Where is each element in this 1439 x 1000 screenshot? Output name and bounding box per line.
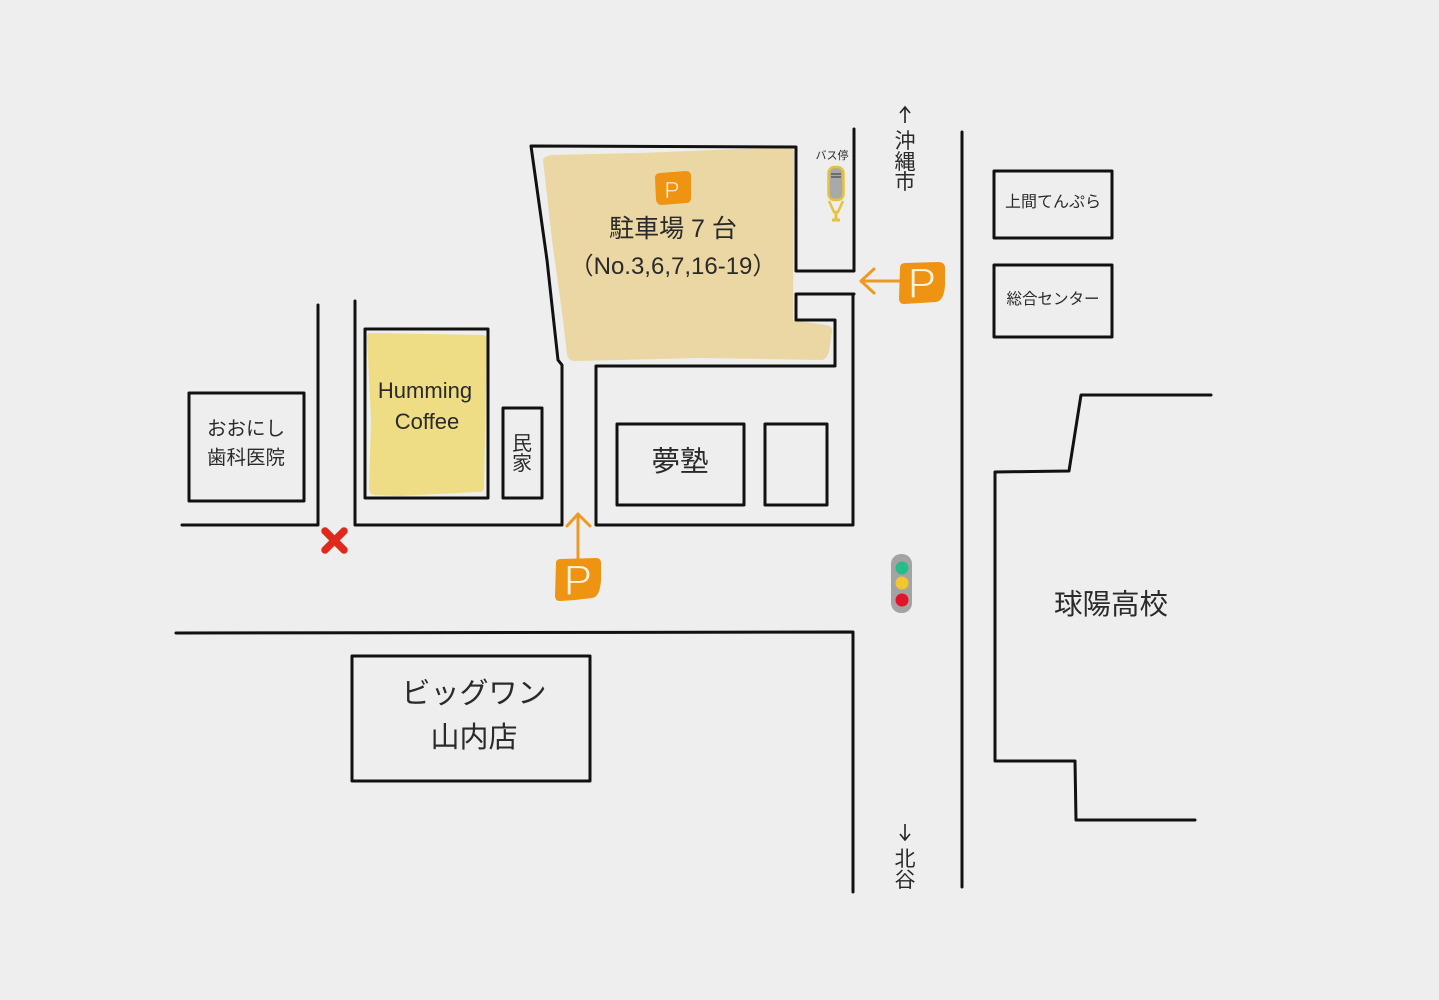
- direction label: Chatan: 谷: [894, 869, 916, 892]
- unnamed building: [765, 424, 827, 505]
- Yumejuku building: 夢塾: [651, 446, 709, 478]
- road edge: main street east side: [960, 132, 964, 887]
- icon: parking sign small: P: [664, 177, 680, 203]
- Kyuyo High School: [995, 395, 1211, 820]
- icon: parking sign small: [655, 171, 691, 205]
- Yumejuku building: [617, 424, 744, 505]
- Sogo Center building: [994, 265, 1112, 337]
- direction label: Chatan: 北: [894, 848, 916, 871]
- clinic building: 歯科医院: [207, 447, 285, 469]
- Kyuyo High School: 球陽高校: [1054, 589, 1168, 621]
- direction label: Okinawa City: 沖: [894, 130, 916, 153]
- house building: 家: [512, 452, 532, 475]
- Humming Coffee building: Humming: [378, 378, 472, 403]
- icon: bus stop: バス停: [816, 149, 848, 162]
- arrow and parking sign: south entrance: P: [564, 557, 592, 605]
- road edge: left side street: [182, 305, 318, 525]
- icon: traffic light: [891, 554, 912, 613]
- parking lot area fill: [543, 147, 832, 361]
- house building: [503, 408, 542, 498]
- Uema Tempura building: [994, 171, 1112, 238]
- parking lot label: 駐車場 7 台: [609, 215, 737, 243]
- arrow and parking sign: east entrance: P: [908, 260, 936, 308]
- direction label: Okinawa City: [894, 107, 916, 194]
- direction label: Okinawa City: 縄: [894, 151, 916, 174]
- arrow and parking sign: south entrance: [555, 514, 601, 605]
- Big One building: [352, 656, 590, 781]
- Humming Coffee building: Coffee: [395, 409, 459, 434]
- clinic building: おおにし: [207, 418, 285, 440]
- direction label: Okinawa City: 市: [894, 171, 916, 194]
- house building: 民: [512, 433, 532, 455]
- direction label: Chatan: [894, 824, 916, 892]
- Sogo Center building: 総合センター: [1006, 290, 1100, 308]
- icon: red cross: [325, 531, 344, 550]
- parking lot outline and road edges: [355, 129, 854, 525]
- Humming Coffee building: [365, 329, 488, 498]
- Uema Tempura building: 上間てんぷら: [1005, 193, 1101, 211]
- Big One building: ビッグワン: [401, 677, 547, 710]
- parking lot label: （No.3,6,7,16-19）: [570, 253, 776, 280]
- parking lot label: [570, 171, 776, 280]
- icon: bus stop: [816, 149, 848, 220]
- Big One building: 山内店: [430, 721, 518, 754]
- clinic building: [189, 393, 304, 501]
- road edge: lower street: [176, 632, 853, 892]
- arrow and parking sign: east entrance: [861, 260, 945, 308]
